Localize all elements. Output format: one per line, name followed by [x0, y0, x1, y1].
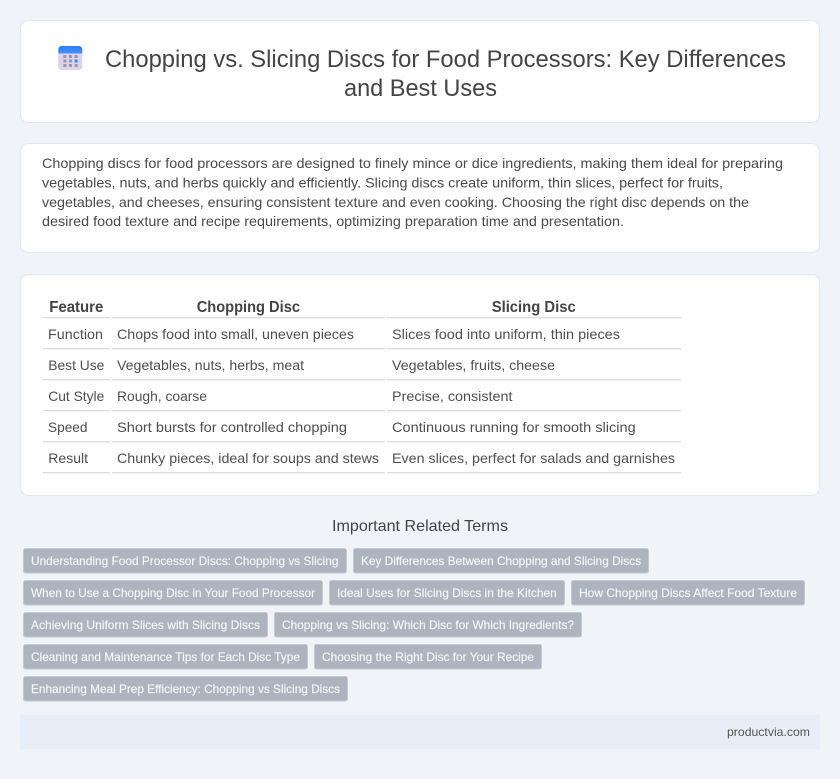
tag — [572, 580, 804, 605]
tag: Key Differences Between Chopping and Slicing Discs — [361, 554, 641, 568]
panel: header — [20, 20, 820, 122]
table row: best use: Best Use — [48, 357, 104, 373]
table row: speed: Speed — [48, 419, 88, 435]
tag: Choosing the Right Disc for Your Recipe — [322, 650, 534, 664]
table header row: Chopping Disc — [197, 299, 300, 316]
heading: related terms: Important Related Terms — [332, 518, 508, 535]
table row: function: Slices food into uniform, thin pieces — [392, 326, 620, 342]
tag — [354, 548, 648, 573]
tag — [24, 612, 268, 637]
title: Chopping vs. Slicing Discs for Food Processors: Key Differences — [105, 46, 786, 73]
table row: cut style: Rough, coarse — [117, 388, 207, 404]
table header row: Feature — [49, 299, 103, 316]
tag: Cleaning and Maintenance Tips for Each Disc Type — [31, 650, 300, 664]
panel: related term tags — [24, 548, 804, 701]
table row: cut style — [43, 388, 681, 411]
tag: How Chopping Discs Affect Food Texture — [579, 586, 797, 600]
tag — [24, 548, 346, 573]
table row: function: Function — [48, 326, 103, 342]
table row: function: Chops food into small, uneven pieces — [117, 326, 354, 342]
footer — [20, 715, 820, 749]
title: and Best Uses — [344, 75, 497, 102]
table row: cut style: Cut Style — [48, 388, 104, 404]
panel: intro paragraph: vegetables, and cheeses, ensuring consistent texture and even cooking. Choosing the right disc depends on the — [42, 194, 749, 210]
table header row — [43, 299, 681, 318]
tag: Understanding Food Processor Discs: Chopping vs Slicing — [31, 554, 338, 568]
table row: result: Result — [48, 450, 88, 466]
panel: comparison table — [20, 274, 820, 496]
tag — [24, 580, 322, 605]
panel: intro paragraph: vegetables, nuts, and herbs quickly and efficiently. Slicing discs create uniform, thin slices, perfect for fruits, — [42, 174, 723, 190]
tag — [24, 644, 308, 669]
tag: Chopping vs Slicing: Which Disc for Which Ingredients? — [282, 618, 574, 632]
icon: calendar grid — [58, 46, 82, 70]
table header row: Slicing Disc — [492, 299, 576, 316]
table row: speed — [43, 419, 681, 442]
tag: Achieving Uniform Slices with Slicing Discs — [31, 618, 260, 632]
panel: intro paragraph — [20, 144, 820, 252]
tag: Enhancing Meal Prep Efficiency: Chopping vs Slicing Discs — [31, 682, 340, 696]
table row: best use — [43, 357, 681, 380]
tag — [274, 612, 582, 637]
table row: speed: Short bursts for controlled chopping — [117, 419, 347, 435]
table row: result: Even slices, perfect for salads and garnishes — [392, 450, 675, 466]
footer: productvia.com — [727, 725, 810, 739]
tag — [314, 644, 542, 669]
table row: result: Chunky pieces, ideal for soups and stews — [117, 450, 379, 466]
title — [105, 46, 786, 102]
table row: result — [43, 450, 681, 473]
table row: speed: Continuous running for smooth slicing — [392, 419, 636, 435]
table row: function — [43, 326, 681, 349]
tag — [24, 676, 348, 701]
table row: cut style: Precise, consistent — [392, 388, 513, 404]
panel: intro paragraph: Chopping discs for food processors are designed to finely mince or dice ingredients, making them ideal for preparing — [42, 155, 783, 171]
panel: intro paragraph: desired food texture and recipe requirements, optimizing preparation time and presentation. — [42, 213, 624, 229]
table row: best use: Vegetables, nuts, herbs, meat — [117, 357, 304, 373]
tag — [330, 580, 564, 605]
table row: best use: Vegetables, fruits, cheese — [392, 357, 555, 373]
tag: When to Use a Chopping Disc in Your Food Processor — [31, 586, 315, 600]
tag: Ideal Uses for Slicing Discs in the Kitchen — [337, 586, 557, 600]
